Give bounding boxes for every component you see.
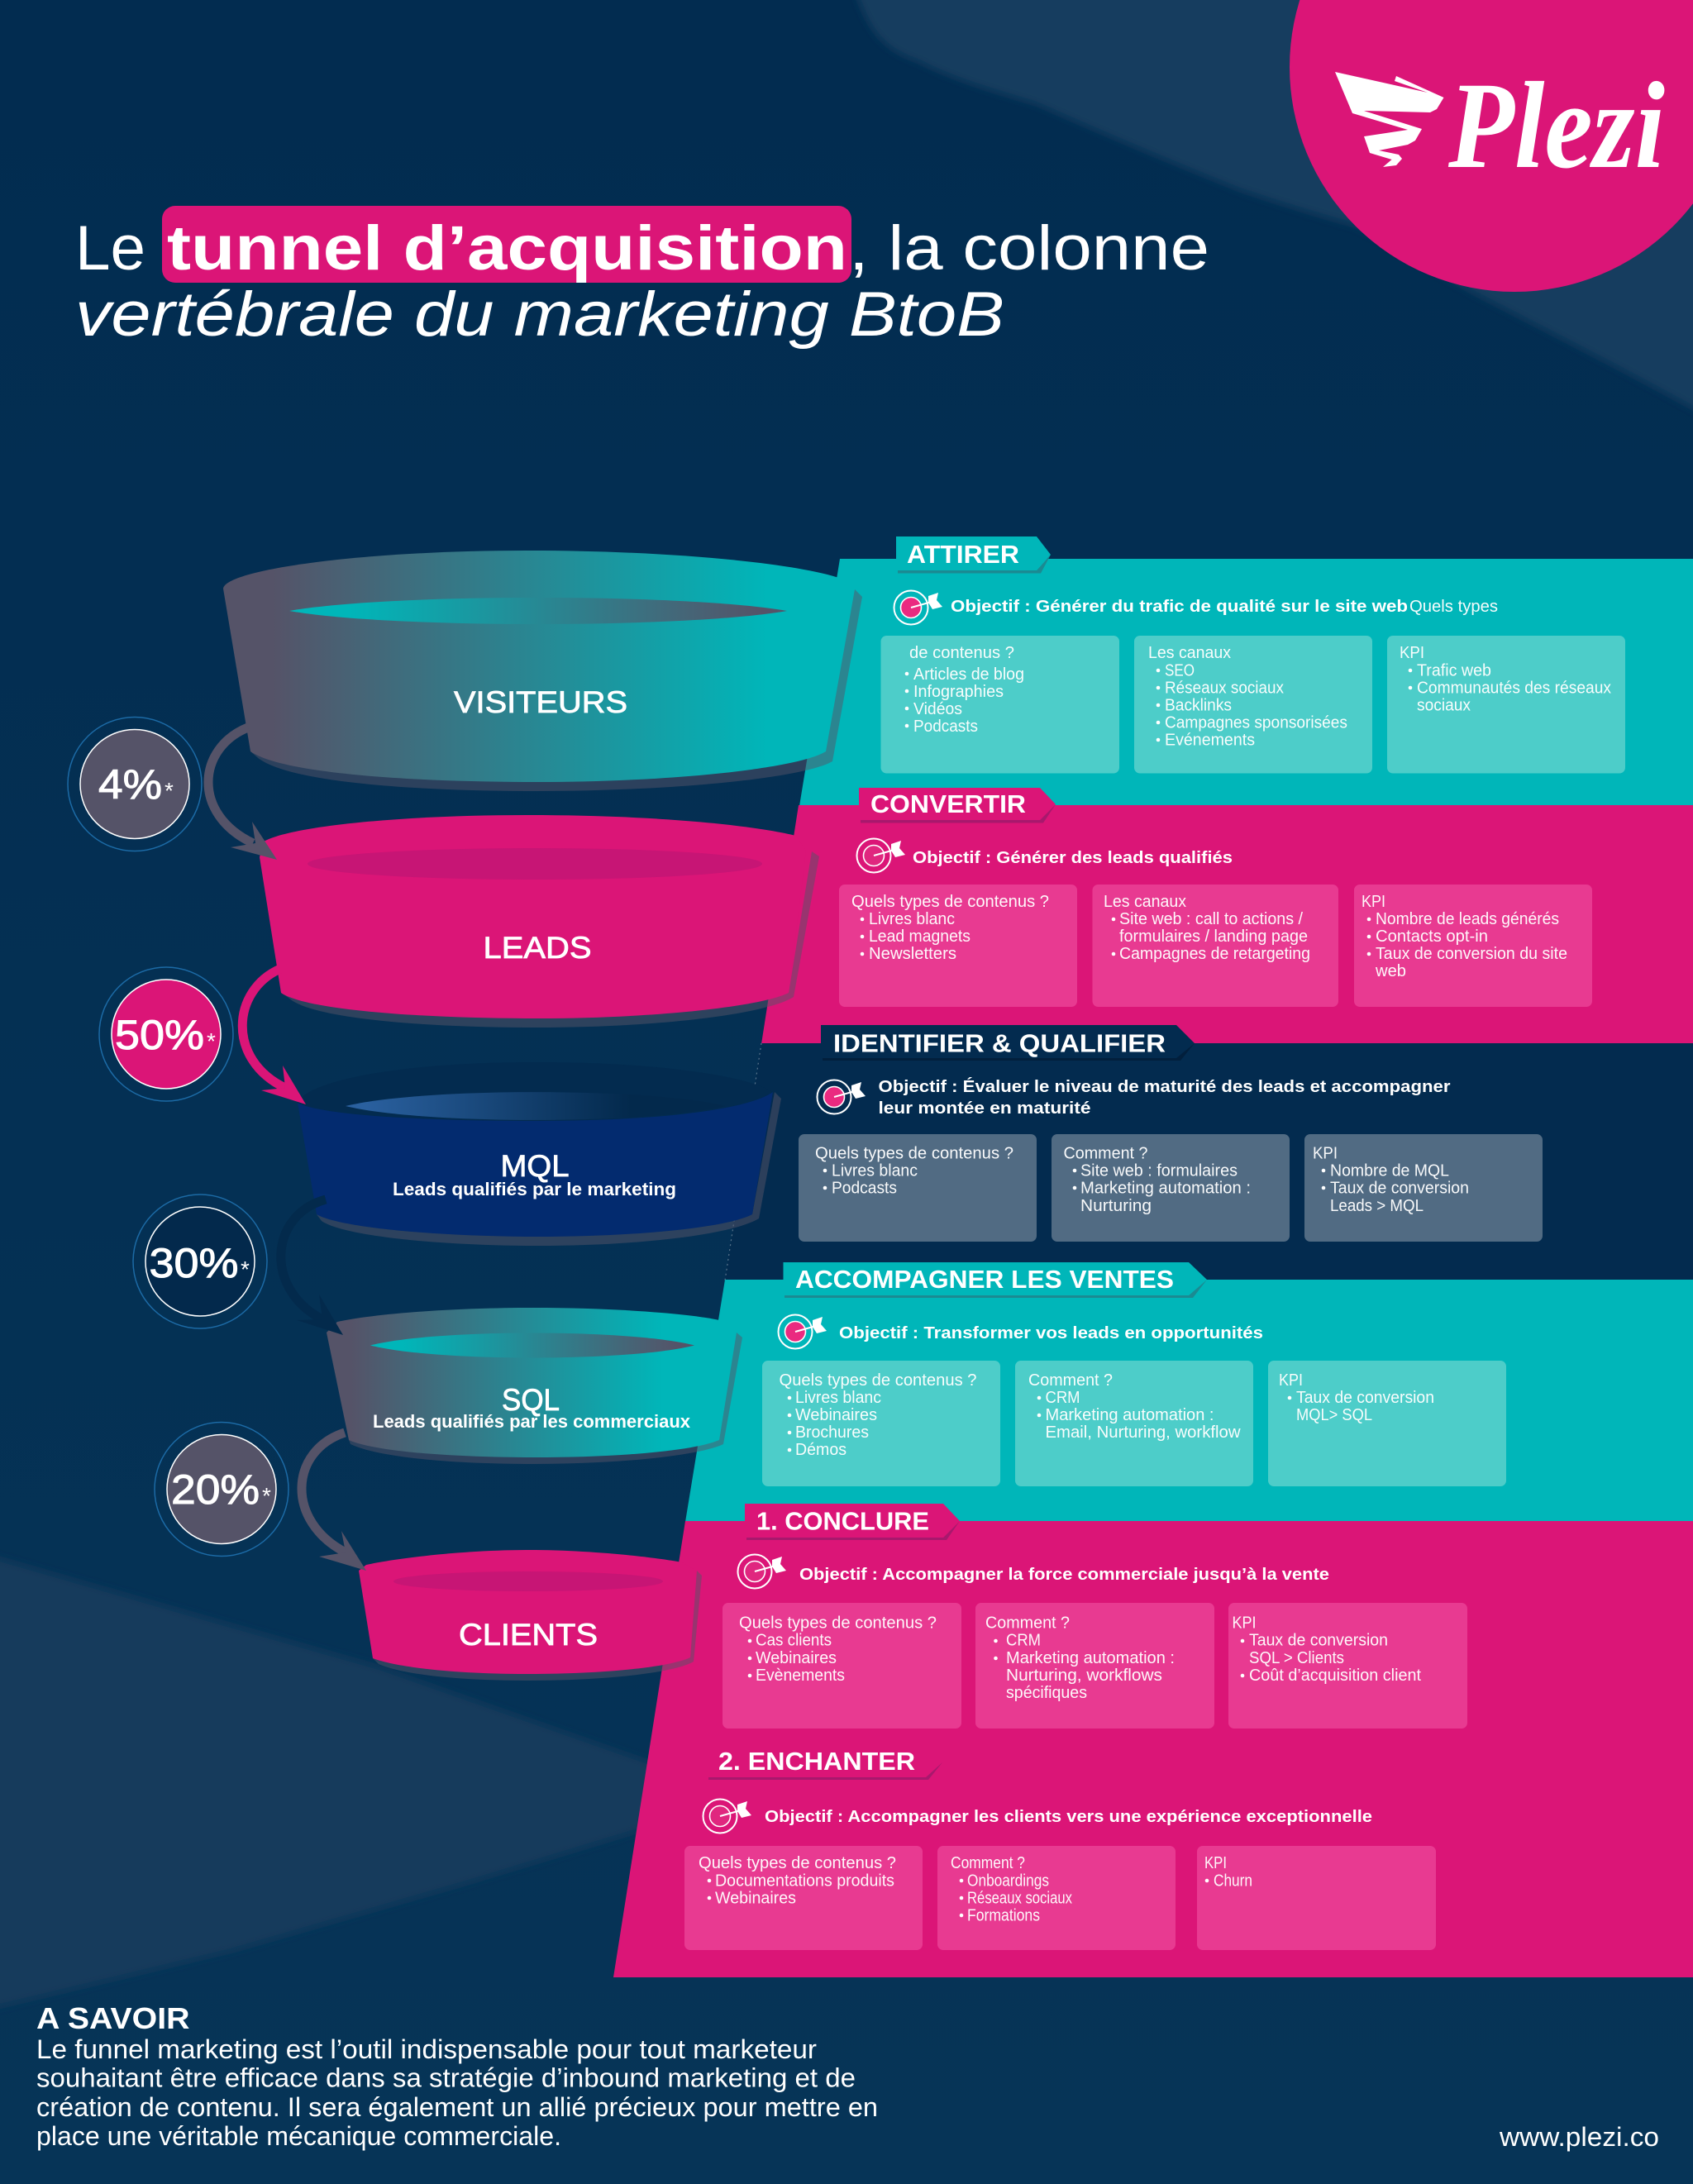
card: kpi: Taux de conversion xyxy=(1249,1630,1388,1650)
objective: identifier: leur montée en maturité xyxy=(878,1099,1091,1118)
objective: enchanter: Objectif : Accompagner les clients vers une expérience exceptionnelle xyxy=(765,1807,1372,1826)
objective: identifier xyxy=(817,1077,1451,1118)
card: comment: Formations xyxy=(967,1906,1040,1924)
card: contenus: Documentations produits xyxy=(715,1872,894,1890)
objective: enchanter xyxy=(703,1799,1372,1834)
objective: convertir: Objectif : Générer des leads qualifiés xyxy=(913,848,1233,867)
card: canaux xyxy=(1134,636,1372,774)
card: contenus: Livres blanc xyxy=(795,1388,881,1407)
card: comment: Marketing automation : xyxy=(1045,1405,1214,1424)
text block: a savoir xyxy=(36,2001,878,2151)
card: canaux: Site web : call to actions / xyxy=(1119,909,1303,928)
icon: target xyxy=(894,590,942,625)
card: canaux: SEO xyxy=(1165,661,1195,680)
card: canaux: Les canaux xyxy=(1148,643,1232,662)
card: comment: Réseaux sociaux xyxy=(967,1888,1073,1908)
card: comment: Site web : formulaires xyxy=(1080,1161,1238,1180)
percentage: 30 xyxy=(133,1195,267,1328)
card: contenus: de contenus ? xyxy=(909,643,1014,662)
card: canaux: Evénements xyxy=(1165,731,1255,749)
card: kpi xyxy=(1304,1134,1543,1242)
card: comment: Marketing automation : xyxy=(1006,1648,1175,1667)
logo wordmark: Plezi xyxy=(1447,57,1665,194)
arrow: sql to clients xyxy=(302,1433,366,1571)
percentage: 20 xyxy=(155,1422,289,1556)
logo badge xyxy=(1290,0,1693,292)
text block: a savoir: création de contenu. Il sera également un allié précieux pour mettre en xyxy=(36,2092,878,2122)
arrow: leads to mql xyxy=(242,969,306,1104)
website url: www.plezi.co xyxy=(1499,2122,1659,2152)
funnel: visiteurs: VISITEURS xyxy=(454,685,627,719)
funnel: mql: MQL xyxy=(501,1149,569,1183)
funnel: mql xyxy=(298,1062,781,1246)
card: contenus: Podcasts xyxy=(913,717,978,736)
icon: logo wing xyxy=(1335,72,1443,167)
ribbon: enchanter: 2. ENCHANTER xyxy=(718,1747,915,1776)
card: canaux: Campagnes de retargeting xyxy=(1119,944,1310,963)
percentage: 50 xyxy=(99,967,233,1101)
ribbon: attirer: ATTIRER xyxy=(907,540,1019,569)
card: comment: CRM xyxy=(1006,1630,1041,1650)
card: canaux: Backlinks xyxy=(1165,696,1232,714)
card: comment: Onboardings xyxy=(967,1872,1049,1890)
card: kpi xyxy=(1228,1603,1467,1729)
percentage: 20: 20% xyxy=(171,1466,260,1513)
card: comment xyxy=(975,1603,1214,1729)
funnel: visiteurs xyxy=(223,551,862,791)
percentage: 50: * xyxy=(207,1028,216,1054)
arrow: visiteurs to leads xyxy=(208,727,277,860)
funnel: clients xyxy=(359,1550,702,1681)
funnel: sql: Leads qualifiés par les commerciaux xyxy=(373,1411,691,1432)
card: kpi: Communautés des réseaux xyxy=(1417,678,1612,698)
title: , la colonne xyxy=(849,213,1209,284)
objective: conclure xyxy=(737,1554,1329,1589)
card: kpi: Nombre de leads générés xyxy=(1376,909,1559,928)
card: comment: Nurturing, workflows xyxy=(1006,1666,1162,1685)
card: contenus: Newsletters xyxy=(869,944,956,963)
card: kpi: MQL> SQL xyxy=(1296,1405,1372,1424)
panel: convertir xyxy=(761,788,1693,1044)
card: contenus: Webinaires xyxy=(756,1648,837,1667)
ribbon: accompagner: ACCOMPAGNER LES VENTES xyxy=(795,1265,1174,1294)
card: comment: Nurturing xyxy=(1080,1196,1152,1215)
text block: a savoir: A SAVOIR xyxy=(36,2001,190,2035)
panel: accompagner les ventes xyxy=(685,1262,1693,1522)
card: contenus: Vidéos xyxy=(913,699,962,718)
card: comment: Marketing automation : xyxy=(1080,1179,1251,1197)
card: contenus: Brochures xyxy=(795,1423,869,1442)
card: contenus: Quels types de contenus ? xyxy=(851,892,1049,911)
objective: attirer: Quels types xyxy=(1409,597,1498,616)
percentage: 50: 50% xyxy=(115,1012,204,1058)
card: kpi: KPI xyxy=(1232,1614,1257,1632)
card: contenus: Quels types de contenus ? xyxy=(815,1144,1013,1162)
card: contenus: Quels types de contenus ? xyxy=(699,1853,896,1872)
objective: attirer xyxy=(894,590,1498,625)
card: kpi: web xyxy=(1375,961,1406,980)
card: kpi xyxy=(1197,1846,1436,1950)
objective: accompagner xyxy=(779,1314,1263,1349)
ribbon: identifier xyxy=(821,1025,1195,1061)
percentage: 4: 4% xyxy=(98,761,162,808)
title xyxy=(75,206,1209,350)
text block: a savoir: place une véritable mécanique commerciale. xyxy=(36,2121,561,2151)
funnel: sql: SQL xyxy=(502,1383,560,1417)
card: comment: Email, Nurturing, workflow xyxy=(1045,1423,1241,1442)
card: kpi: KPI xyxy=(1313,1144,1338,1162)
icon: target xyxy=(703,1799,751,1834)
icon: target xyxy=(779,1314,827,1349)
card: contenus xyxy=(881,636,1119,774)
card: canaux: Les canaux xyxy=(1104,892,1187,911)
card: kpi: Taux de conversion du site xyxy=(1376,944,1567,963)
card: kpi: Contacts opt-in xyxy=(1376,927,1488,946)
ribbon: convertir: CONVERTIR xyxy=(870,789,1026,818)
card: comment xyxy=(1052,1134,1290,1242)
title: tunnel d’acquisition xyxy=(167,213,847,284)
ribbon: identifier: IDENTIFIER & QUALIFIER xyxy=(833,1028,1166,1058)
ribbon: attirer xyxy=(896,536,1051,574)
card: contenus xyxy=(762,1361,1000,1486)
card: contenus: Podcasts xyxy=(832,1179,897,1197)
card: contenus xyxy=(839,885,1077,1007)
text block: a savoir: souhaitant être efficace dans sa stratégie d’inbound marketing et de xyxy=(36,2063,856,2093)
card: contenus: Quels types de contenus ? xyxy=(739,1614,937,1632)
card: contenus xyxy=(799,1134,1037,1242)
card: comment xyxy=(1015,1361,1253,1486)
card: kpi: KPI xyxy=(1279,1371,1303,1390)
panel: conclure et enchanter xyxy=(613,1504,1693,1977)
card: canaux: Campagnes sponsorisées xyxy=(1165,713,1347,732)
card: contenus: Lead magnets xyxy=(869,927,970,946)
ribbon: conclure xyxy=(745,1504,960,1540)
objective: attirer: Objectif : Générer du trafic de qualité sur le site web xyxy=(951,597,1408,616)
funnel: leads: LEADS xyxy=(483,931,592,965)
card: kpi: Trafic web xyxy=(1417,661,1491,680)
card: contenus: Livres blanc xyxy=(869,909,955,928)
ribbon: conclure: 1. CONCLURE xyxy=(756,1506,929,1536)
card: contenus: Cas clients xyxy=(756,1630,832,1650)
card: kpi: Coût d’acquisition client xyxy=(1249,1666,1421,1685)
card: kpi: KPI xyxy=(1362,892,1385,911)
percentage: 4 xyxy=(68,718,202,851)
card: contenus xyxy=(723,1603,961,1729)
panel: attirer xyxy=(799,536,1693,806)
funnel: mql: Leads qualifiés par le marketing xyxy=(393,1179,676,1199)
percentage: 20: * xyxy=(262,1483,271,1509)
card: kpi: KPI xyxy=(1400,643,1424,662)
card: comment xyxy=(937,1846,1176,1950)
title: vertébrale du marketing BtoB xyxy=(75,279,1004,350)
card: contenus: Quels types de contenus ? xyxy=(779,1371,977,1390)
card: contenus: Webinaires xyxy=(795,1405,877,1424)
card: contenus: Articles de blog xyxy=(913,665,1024,684)
card: kpi: Taux de conversion xyxy=(1296,1388,1434,1407)
card: canaux xyxy=(1093,885,1338,1007)
panel: identifier et qualifier xyxy=(725,1025,1693,1280)
card: comment: Comment ? xyxy=(951,1853,1025,1872)
card: kpi: Taux de conversion xyxy=(1330,1179,1469,1197)
icon: target xyxy=(737,1554,786,1589)
card: contenus: Infographies xyxy=(913,682,1004,701)
card: canaux: Réseaux sociaux xyxy=(1165,678,1285,698)
card: kpi: Leads > MQL xyxy=(1330,1196,1424,1215)
percentage: 30: * xyxy=(241,1257,250,1282)
card: kpi: Churn xyxy=(1214,1872,1252,1890)
funnel: clients: CLIENTS xyxy=(459,1618,598,1652)
card: canaux: formulaires / landing page xyxy=(1119,927,1308,946)
funnel: sql xyxy=(327,1308,742,1464)
text block: a savoir: Le funnel marketing est l’outil indispensable pour tout marketeur xyxy=(36,2034,817,2064)
card: kpi xyxy=(1268,1361,1506,1486)
title: Le xyxy=(75,213,145,284)
card: kpi xyxy=(1354,885,1592,1007)
card: contenus: Livres blanc xyxy=(832,1161,918,1180)
card: comment: Comment ? xyxy=(1028,1371,1113,1390)
card: kpi: sociaux xyxy=(1417,696,1471,714)
arrow: mql to sql xyxy=(281,1199,343,1335)
icon: target xyxy=(856,838,905,873)
card: contenus: Webinaires xyxy=(715,1888,796,1908)
objective: convertir xyxy=(856,838,1233,873)
objective: accompagner: Objectif : Transformer vos leads en opportunités xyxy=(839,1323,1263,1342)
card: comment: Comment ? xyxy=(1063,1144,1147,1162)
card: contenus: Evènements xyxy=(756,1666,845,1685)
card: kpi: SQL > Clients xyxy=(1249,1648,1344,1667)
objective: conclure: Objectif : Accompagner la force commerciale jusqu’à la vente xyxy=(799,1565,1329,1584)
funnel: leads xyxy=(260,815,819,1028)
card: kpi xyxy=(1387,636,1625,774)
objective: identifier: Objectif : Évaluer le niveau de maturité des leads et accompagner xyxy=(878,1077,1451,1096)
card: contenus: Démos xyxy=(795,1440,846,1459)
card: contenus xyxy=(684,1846,923,1950)
icon: target xyxy=(817,1080,866,1114)
percentage: 30: 30% xyxy=(149,1240,238,1286)
card: kpi: KPI xyxy=(1204,1853,1227,1872)
card: comment: Comment ? xyxy=(985,1614,1070,1632)
ribbon: convertir xyxy=(859,788,1056,823)
card: kpi: Nombre de MQL xyxy=(1330,1161,1449,1180)
percentage: 4: * xyxy=(165,778,174,804)
card: comment: spécifiques xyxy=(1006,1683,1087,1702)
card: comment: CRM xyxy=(1045,1388,1080,1407)
